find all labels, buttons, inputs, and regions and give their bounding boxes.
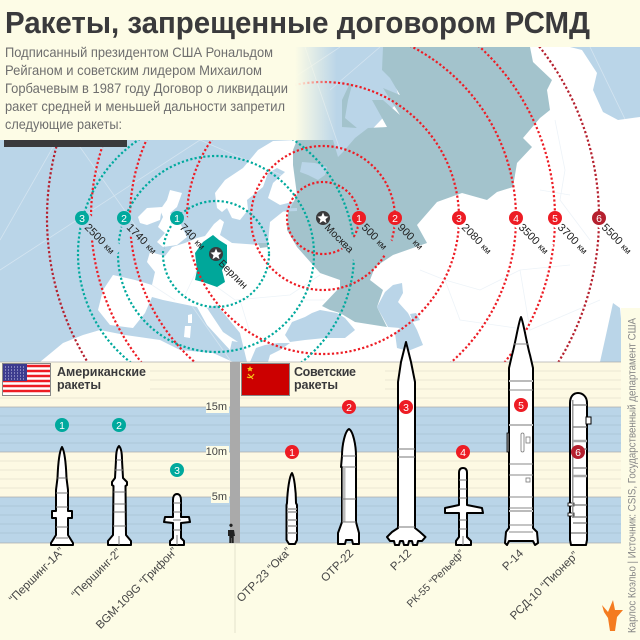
icon: USSR flag xyxy=(242,364,290,396)
missile name labels: Р-12 xyxy=(388,548,414,573)
missile: R-14 xyxy=(505,317,538,545)
missile name labels: ОТР-23 “Ока” xyxy=(235,546,294,605)
title: Ракеты, запрещенные договором РСМД xyxy=(5,5,590,40)
missile name labels: Р-14 xyxy=(500,547,527,573)
American missile number markers: 2 xyxy=(116,420,122,432)
missile name labels: РК-55 “Рельеф” xyxy=(405,547,467,610)
heading: Soviet missiles xyxy=(294,365,356,392)
American missile number markers: 3 xyxy=(174,465,180,477)
height chart background xyxy=(0,362,621,543)
Soviet missile number markers: 2 xyxy=(346,402,352,414)
map range markers: 3 xyxy=(79,213,85,225)
Germany highlighted xyxy=(195,235,227,287)
missile name labels: РСД-10 “Пионер” xyxy=(508,550,581,623)
American missile number markers: 1 xyxy=(59,420,65,432)
map range markers: 1 xyxy=(174,213,180,225)
range labels on map: Берлин xyxy=(216,258,250,292)
map range markers: 3 xyxy=(456,213,462,225)
missile name labels: BGM-109G “Грифон” xyxy=(94,546,180,632)
Soviet missile number markers: 5 xyxy=(518,400,524,412)
Soviet missile number markers: 1 xyxy=(289,447,295,459)
map range markers: 2 xyxy=(392,213,398,225)
range labels on map: 5500 км xyxy=(599,222,634,257)
heading: American missiles: Американские xyxy=(57,365,146,379)
American missile number markers xyxy=(55,418,184,477)
missile: OTR-23 Oka xyxy=(286,473,297,544)
range labels on map: 2500 км xyxy=(82,222,117,257)
map of Europe and western Russia xyxy=(0,47,640,362)
Soviet missile number markers: 6 xyxy=(575,447,581,459)
range labels on map xyxy=(82,222,634,292)
scale labels xyxy=(206,401,229,503)
icon: RFE/RL flame logo xyxy=(602,600,623,631)
missile: Pershing-2 xyxy=(108,446,131,545)
range labels on map: 900 км xyxy=(395,222,426,252)
missile name labels: “Першинг-2” xyxy=(70,547,124,601)
intro text: Горбачевым в 1987 году Договор о ликвидации xyxy=(5,80,288,96)
Soviet missile number markers: 3 xyxy=(403,402,409,414)
heading: American missiles xyxy=(57,365,146,392)
range labels on map: Москва xyxy=(322,222,356,256)
intro text xyxy=(5,44,288,132)
right credit column background xyxy=(621,308,640,640)
range labels on map: 500 км xyxy=(359,222,390,252)
map range markers: 5 xyxy=(552,213,558,225)
icon: Berlin star xyxy=(209,247,223,261)
Soviet missile number markers xyxy=(285,398,585,459)
map range markers: 2 xyxy=(121,213,127,225)
heading: American missiles: ракеты xyxy=(57,378,101,392)
range labels on map: 740 км xyxy=(177,222,208,252)
missile name labels xyxy=(7,546,581,632)
range labels on map: 3700 км xyxy=(555,222,590,257)
title and intro panel background xyxy=(0,0,640,140)
map range markers: 6 xyxy=(596,213,602,225)
range labels on map: 1740 км xyxy=(124,222,159,257)
missile: Pershing-1A xyxy=(51,447,73,545)
bottom label divider xyxy=(234,543,236,633)
icon: US flag xyxy=(2,364,50,396)
dark accent bar xyxy=(4,140,127,147)
missile: OTR-22 xyxy=(338,429,359,544)
map range markers xyxy=(75,211,606,225)
icon: human scale figure xyxy=(228,524,235,543)
icon: Moscow star xyxy=(316,211,330,225)
fade of map into intro panel xyxy=(295,47,337,140)
intro text: следующие ракеты: xyxy=(5,116,122,132)
heading: Soviet missiles: ракеты xyxy=(294,378,338,392)
intro text: Подписанный президентом США Рональдом xyxy=(5,44,273,60)
missile: RK-55 Relief xyxy=(445,468,483,545)
range circles xyxy=(46,47,600,362)
missile: R-12 xyxy=(387,342,426,545)
intro text: ракет средней и меньшей дальности запретил xyxy=(5,98,285,114)
missile: RSD-10 Pioneer xyxy=(568,393,591,545)
map range markers: 1 xyxy=(356,213,362,225)
range labels on map: 2080 км xyxy=(459,222,494,257)
heading: Soviet missiles: Советские xyxy=(294,365,356,379)
scale labels: 15m xyxy=(206,401,227,413)
missile name labels: “Першинг-1А” xyxy=(7,546,67,606)
missile name labels: ОТР-22 xyxy=(319,548,356,585)
range labels on map: 3500 км xyxy=(516,222,551,257)
scale labels: 5m xyxy=(212,491,227,503)
missile: BGM-109G Gryphon xyxy=(164,494,190,545)
scale labels: 10m xyxy=(206,446,227,458)
Soviet missile number markers: 4 xyxy=(460,447,466,459)
intro text: Рейганом и советским лидером Михаилом xyxy=(5,62,262,78)
map range markers: 4 xyxy=(513,213,519,225)
credits: Карлос Коэльо | Источник: CSIS, Государственный департамент США xyxy=(626,317,638,633)
